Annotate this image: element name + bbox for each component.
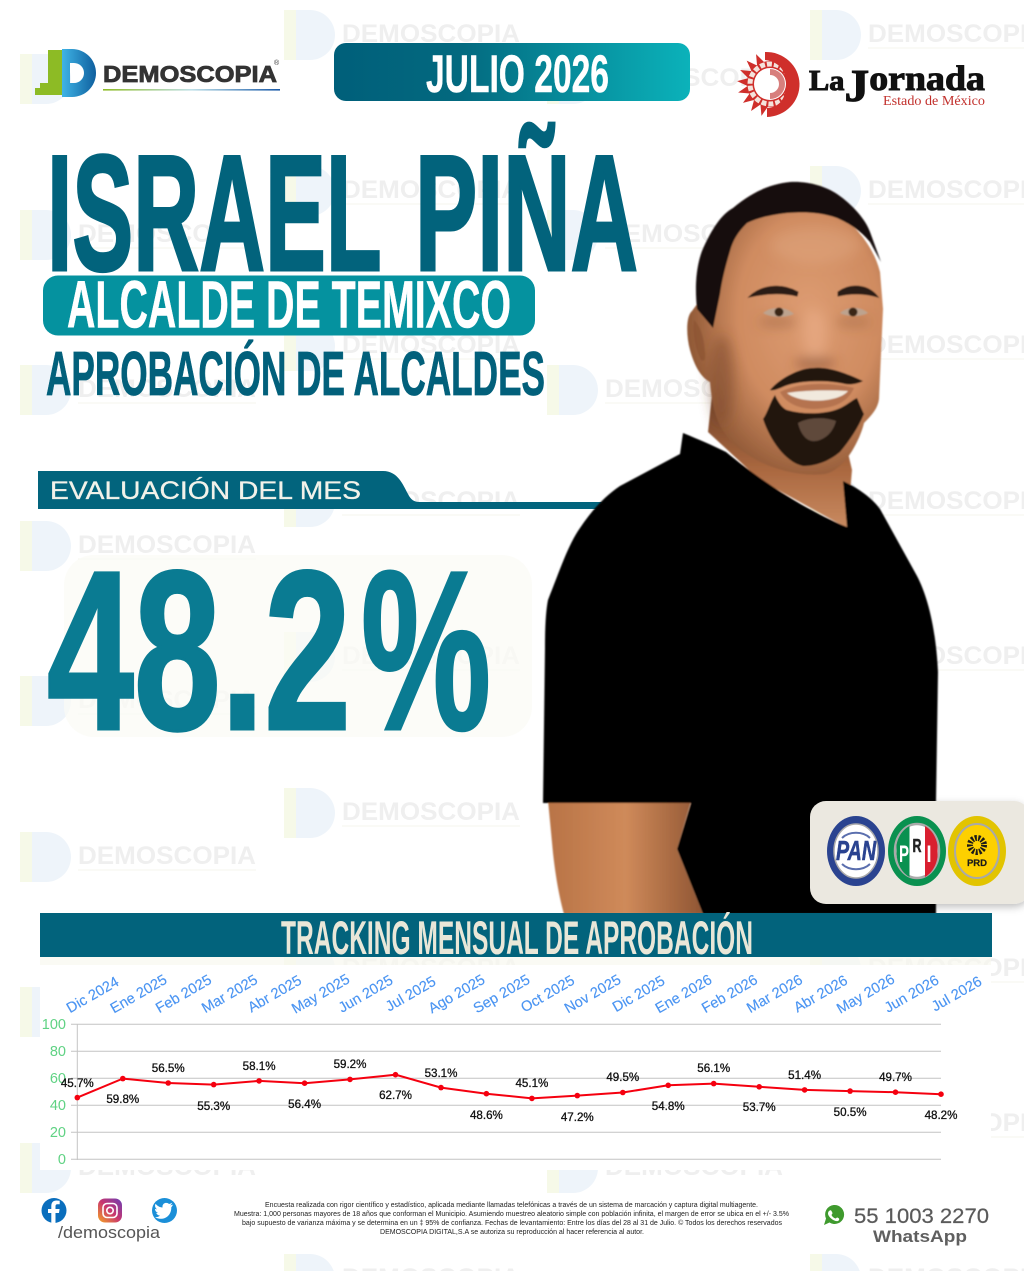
- icon: PRD: PRD: [967, 858, 987, 869]
- y axis labels: 80: [50, 1044, 66, 1060]
- data value labels: 51.4%: [788, 1069, 821, 1082]
- text: DEMOSCOPIA: [342, 331, 520, 359]
- data value labels: 53.1%: [425, 1067, 457, 1080]
- logo: La Jornada: Estado de México: [883, 93, 985, 108]
- x axis month labels: Abr 2026: [791, 973, 851, 1016]
- icon: PAN: PAN: [836, 835, 877, 866]
- big score value: %: [361, 525, 491, 778]
- footer methodology note: Encuesta realizada con rigor científico y estadístico, aplicada mediante llamadas telefónicas a través de un sistema de marcación y captura digital multiagente.: [265, 1202, 758, 1209]
- icon: instagram: [98, 1198, 122, 1222]
- x axis month labels: Ene 2025: [108, 972, 170, 1017]
- data value labels: 45.1%: [515, 1077, 548, 1090]
- footer methodology note: DEMOSCOPIA DIGITAL,S.A se autoriza su reproducción al hacer referencia al autor.: [380, 1229, 644, 1236]
- icon: forearm: [548, 798, 703, 914]
- icon: hair: [696, 182, 881, 328]
- y axis labels: 0: [58, 1152, 66, 1168]
- icon: face shading: [710, 227, 871, 425]
- data value labels: 56.5%: [152, 1062, 185, 1075]
- logo: La Jornada: ornada: [869, 59, 985, 98]
- footer methodology note: Muestra: 1,000 personas mayores de 18 años que conforman el Municipio. Asumiendo muestreo aleatorio simple con población infinita, el margen de error se ubica en el +/- 3.5%: [234, 1211, 789, 1218]
- x axis month labels: May 2026: [834, 972, 898, 1017]
- text: DEMOSCOPIA: [605, 64, 783, 92]
- y axis labels: 100: [42, 1017, 66, 1033]
- data value labels: 49.7%: [879, 1071, 912, 1084]
- subtitle pill: Alcalde de Temixco: [43, 268, 535, 342]
- banner: Evaluación del mes: [38, 471, 602, 509]
- text: DEMOSCOPIA: [78, 375, 256, 403]
- icon: eyebrows: [749, 286, 878, 297]
- chart panel background: [40, 965, 991, 1170]
- icon: teeth: [787, 390, 848, 401]
- icon: twitter: [152, 1198, 177, 1223]
- title: candidate name: ISRAEL: [47, 121, 380, 305]
- icon: sun emblem: [737, 52, 800, 117]
- data value labels: 62.7%: [379, 1089, 412, 1102]
- x axis month labels: Jun 2025: [336, 973, 396, 1016]
- data value labels: 53.7%: [743, 1101, 776, 1114]
- date pill: JULIO 2026: JULIO 2026: [426, 45, 609, 104]
- icon: PRD: [948, 816, 1006, 886]
- icon: head: [687, 198, 883, 475]
- logo: La Jornada: [737, 52, 985, 117]
- data value labels: 59.2%: [334, 1058, 366, 1071]
- text: DEMOSCOPIA: [78, 686, 256, 714]
- data value labels: 56.4%: [288, 1098, 321, 1111]
- data value labels: 54.8%: [652, 1100, 685, 1113]
- y axis labels: 60: [50, 1071, 66, 1087]
- icon: facebook: [42, 1198, 66, 1223]
- heading: Aprobación de alcaldes: APROBACIÓN DE ALCALDES: [46, 340, 545, 409]
- text: DEMOSCOPIA: [342, 798, 520, 826]
- data value labels: 56.1%: [697, 1062, 730, 1075]
- logo: La Jornada: La: [809, 66, 844, 97]
- text: DEMOSCOPIA: [605, 1153, 783, 1181]
- text: DEMOSCOPIA: [342, 176, 520, 204]
- big score value: 48.2: [47, 525, 351, 778]
- x axis month labels: Dic 2025: [610, 973, 668, 1016]
- x axis month labels: Mar 2026: [744, 972, 806, 1017]
- data line: [77, 1075, 941, 1098]
- icon: soul patch skin: [798, 418, 836, 441]
- subtitle pill: Alcalde de Temixco: ALCALDE DE TEMIXCO: [67, 268, 511, 342]
- x axis month labels: Dic 2024: [64, 974, 122, 1017]
- text: DEMOSCOPIA: [78, 842, 256, 870]
- logo: Demoscopia: ®: [274, 59, 280, 67]
- text: DEMOSCOPIA: [605, 220, 783, 248]
- social icons and handle: /demoscopia: [58, 1223, 161, 1242]
- data value labels: 50.5%: [834, 1106, 867, 1119]
- logo: Demoscopia: [35, 49, 280, 97]
- icon: PRI: P: [899, 841, 909, 868]
- chart panel tint band: [40, 957, 991, 965]
- x axis month labels: May 2025: [289, 972, 353, 1017]
- text: DEMOSCOPIA: [78, 531, 256, 559]
- data value labels: 55.3%: [197, 1100, 230, 1113]
- text: DEMOSCOPIA: [78, 220, 256, 248]
- data value labels: 47.2%: [561, 1111, 594, 1124]
- x axis month labels: Sep 2025: [471, 972, 533, 1017]
- x axis month labels: Abr 2025: [245, 973, 305, 1016]
- x axis month labels: [64, 972, 985, 1017]
- icon: black polo shirt: [543, 433, 938, 914]
- icon: PAN: [827, 816, 885, 886]
- line chart: monthly approval tracking: [42, 972, 985, 1168]
- text: DEMOSCOPIA: [605, 375, 783, 403]
- x axis month labels: Jun 2026: [882, 973, 942, 1016]
- data value labels: 59.8%: [106, 1093, 139, 1106]
- icon: neck: [708, 395, 852, 528]
- whatsapp contact: 55 1003 2270: [854, 1205, 989, 1228]
- x axis month labels: Jul 2026: [929, 974, 985, 1015]
- y axis labels: 40: [50, 1098, 66, 1114]
- icon: beard and moustache: [770, 368, 863, 390]
- title: candidate name: PIÑA: [415, 121, 638, 305]
- data points: [74, 1072, 944, 1101]
- text: DEMOSCOPIA: [342, 487, 520, 515]
- x axis month labels: Feb 2026: [699, 972, 761, 1017]
- x axis month labels: Nov 2025: [562, 972, 624, 1017]
- x axis month labels: Jul 2025: [383, 974, 439, 1015]
- data value labels: 49.5%: [606, 1071, 639, 1084]
- data value labels: 48.2%: [925, 1109, 957, 1122]
- x axis month labels: Ene 2026: [653, 972, 715, 1017]
- footer methodology note: [234, 1202, 789, 1236]
- text: DEMOSCOPIA: [78, 1153, 256, 1181]
- x axis month labels: Oct 2025: [518, 973, 578, 1016]
- x axis month labels: Feb 2025: [153, 972, 215, 1017]
- banner: Evaluación del mes: EVALUACIÓN DEL MES: [50, 476, 361, 505]
- icon: PRI: I: [926, 841, 932, 868]
- icon: PRI: R: [912, 836, 922, 856]
- icon: whatsapp: [824, 1205, 844, 1225]
- data value labels: 58.1%: [243, 1060, 276, 1073]
- icon: eyes: [763, 308, 868, 317]
- panel: score background: [64, 555, 532, 737]
- icon: lips: [780, 384, 854, 409]
- data value labels: 48.6%: [470, 1109, 503, 1122]
- date pill: JULIO 2026: [334, 43, 690, 104]
- text: DEMOSCOPIA: [342, 20, 520, 48]
- text: DEMOSCOPIA: [342, 954, 520, 982]
- icon: inner ear: [693, 320, 705, 361]
- panel: party logos: [810, 801, 1024, 904]
- footer methodology note: bajo supuesto de varianza máxima y se determina en un ‡ 95% de confianza. Fechas de levantamiento: Entre los días del 28 al 31 de Julio. © Todos los derechos reservados: [242, 1219, 782, 1227]
- y axis labels: [42, 1017, 66, 1168]
- text: DEMOSCOPIA: [342, 642, 520, 670]
- whatsapp contact: WhatsApp: [873, 1227, 967, 1246]
- data value labels: [61, 1058, 957, 1124]
- icon: PRI: [888, 816, 946, 886]
- logo: La Jornada: J: [844, 60, 869, 111]
- whatsapp contact: [824, 1205, 989, 1246]
- icon: D mark: [35, 49, 96, 97]
- y axis labels: 20: [50, 1125, 66, 1141]
- social icons and handle: [42, 1198, 177, 1242]
- logo: Demoscopia: DEMOSCOPIA: [103, 61, 277, 87]
- data value labels: 45.7%: [61, 1077, 94, 1090]
- photo: Israel Piña portrait: [543, 182, 938, 914]
- x axis month labels: Mar 2025: [199, 972, 261, 1017]
- x axis month labels: Ago 2025: [426, 972, 488, 1017]
